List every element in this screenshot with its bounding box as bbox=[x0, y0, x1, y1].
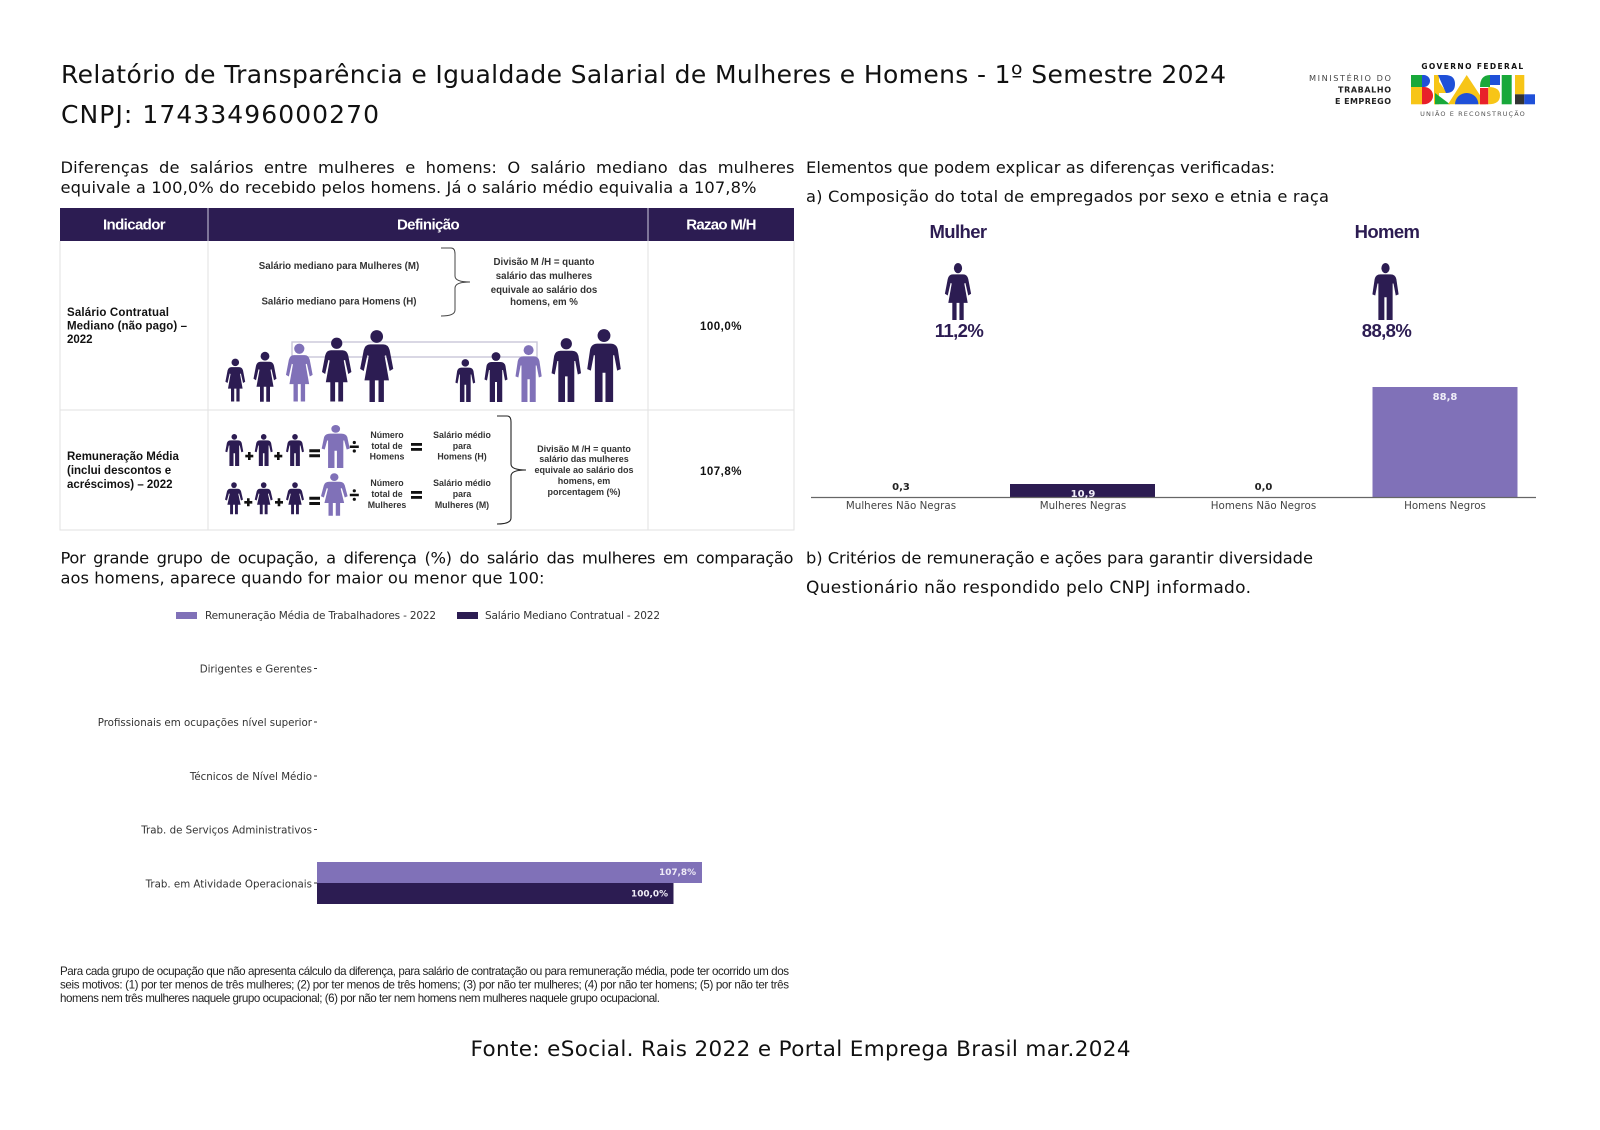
bar chart: sex and race composition: Mulheres Negras bbox=[1040, 500, 1126, 512]
row: remuneração média: equivale ao salário dos bbox=[534, 465, 634, 475]
icon group: women average bbox=[225, 473, 422, 516]
A bbox=[1448, 75, 1486, 104]
logo: Ministério do Trabalho e Governo Federal: GOVERNO FEDERAL bbox=[1421, 62, 1525, 71]
stat: homem bbox=[1355, 221, 1420, 341]
bar chart: sex and race composition: 88,8 bbox=[1433, 392, 1457, 403]
row: salário contratual mediano: Mediano (não pago) – bbox=[67, 320, 188, 332]
CNPJ heading: CNPJ: 17433496000270 bbox=[61, 100, 379, 129]
heading: explanatory elements: Elementos que podem explicar as diferenças verificadas: bbox=[806, 158, 1275, 177]
legend: Remuneração Média de Trabalhadores - 2022 bbox=[205, 610, 436, 622]
row: remuneração média: total de bbox=[371, 441, 403, 451]
row: remuneração média: para bbox=[453, 441, 471, 451]
row: remuneração média: Mulheres bbox=[368, 500, 406, 510]
row: remuneração média: acréscimos) – 2022 bbox=[67, 479, 172, 491]
logo: Ministério do Trabalho e Governo Federal: UNIÃO E RECONSTRUÇÃO bbox=[1420, 109, 1526, 118]
bar chart: occupation groups: Dirigentes e Gerentes bbox=[200, 664, 312, 676]
bar chart: sex and race composition bbox=[811, 387, 1536, 512]
row: remuneração média: Salário médio bbox=[433, 430, 491, 440]
row: remuneração média: total de bbox=[371, 489, 403, 499]
logo: Ministério do Trabalho e Governo Federal bbox=[1309, 62, 1535, 118]
logo: Ministério do Trabalho e Governo Federal: MINISTÉRIO DO bbox=[1309, 72, 1391, 83]
row: remuneração média: Homens (H) bbox=[437, 452, 487, 462]
indicators table bbox=[60, 208, 794, 530]
B bbox=[1411, 75, 1422, 87]
bar: salário mediano 100,0%: 100,0% bbox=[631, 890, 668, 900]
bar chart: sex and race composition: 0,3 bbox=[892, 482, 910, 493]
row: salário contratual mediano: 100,0% bbox=[700, 321, 742, 333]
row: remuneração média: Número bbox=[370, 478, 404, 488]
row: salário contratual mediano: 2022 bbox=[67, 334, 93, 346]
row: remuneração média: Mulheres (M) bbox=[435, 500, 489, 510]
row: remuneração média: salário das mulheres bbox=[539, 454, 629, 464]
row: salário contratual mediano: equivale ao salário dos bbox=[491, 285, 597, 296]
bar: salário mediano 100,0% bbox=[317, 883, 674, 904]
row: remuneração média: Remuneração Média bbox=[67, 451, 179, 463]
row: remuneração média: Salário médio bbox=[433, 478, 491, 488]
legend: Salário Mediano Contratual - 2022 bbox=[485, 610, 660, 622]
row: salário contratual mediano: homens, em % bbox=[510, 297, 578, 308]
footnote: Para cada grupo de ocupação que não apresenta cálculo da diferença, para salário de contratação ou para remuneração média, pode ter ocorrido um dos bbox=[60, 965, 789, 978]
L bbox=[1515, 75, 1524, 94]
table header: Razao M/H bbox=[686, 216, 756, 234]
bar chart: occupation groups: Técnicos de Nível Médio bbox=[189, 771, 312, 783]
stat: mulher bbox=[929, 221, 987, 341]
stat: homem: Homem bbox=[1355, 221, 1420, 242]
row: remuneração média: porcentagem (%) bbox=[547, 487, 621, 497]
row: salário contratual mediano: Salário mediano para Mulheres (M) bbox=[259, 261, 419, 272]
S bbox=[1480, 75, 1490, 87]
icon group: women by salary bbox=[225, 330, 393, 402]
bar chart: occupation groups: Profissionais em ocupações nível superior bbox=[98, 717, 313, 729]
row: remuneração média: (inclui descontos e bbox=[67, 465, 171, 477]
row: remuneração média bbox=[67, 416, 742, 524]
row: salário contratual mediano: Salário mediano para Homens (H) bbox=[261, 296, 417, 308]
stat: homem: 88,8% bbox=[1362, 320, 1411, 341]
bar chart: sex and race composition: Homens Negros bbox=[1404, 500, 1486, 512]
table header: Definição bbox=[397, 216, 459, 234]
row: salário contratual mediano: salário das mulheres bbox=[496, 271, 592, 282]
icon group: men average bbox=[225, 425, 422, 468]
table header: Indicador bbox=[103, 216, 166, 234]
I bbox=[1502, 75, 1512, 104]
row: remuneração média: homens, em bbox=[558, 476, 610, 486]
intro paragraph: salary differences bbox=[60, 158, 794, 197]
intro paragraph: salary differences: Diferenças de salários entre mulheres e homens: O salário mediano das mulheres bbox=[60, 158, 794, 177]
R bbox=[1434, 75, 1439, 104]
bar chart: sex and race composition: 0,0 bbox=[1255, 482, 1272, 493]
bar chart: occupation groups bbox=[98, 664, 702, 904]
paragraph: occupation groups bbox=[60, 548, 794, 588]
heading: criteria: b) Critérios de remuneração e ações para garantir diversidade bbox=[806, 548, 1313, 568]
row: remuneração média: Homens bbox=[370, 452, 404, 462]
icon: large brace bbox=[497, 416, 526, 524]
logo: Ministério do Trabalho e Governo Federal: TRABALHO bbox=[1338, 86, 1391, 94]
bar chart: sex and race composition: 10,9 bbox=[1071, 489, 1095, 500]
table header bbox=[60, 208, 794, 241]
logo: Ministério do Trabalho e Governo Federal: E EMPREGO bbox=[1335, 97, 1391, 106]
text: questionnaire not answered: Questionário não respondido pelo CNPJ informado. bbox=[806, 578, 1251, 598]
bar chart: sex and race composition: Homens Não Negros bbox=[1211, 500, 1316, 512]
paragraph: occupation groups: Por grande grupo de ocupação, a diferença (%) do salário das mulheres em comparação bbox=[60, 548, 794, 568]
row: remuneração média: Número bbox=[370, 430, 404, 440]
bar: remuneração média 107,8% bbox=[317, 862, 702, 883]
stat: mulher: 11,2% bbox=[935, 320, 983, 341]
footnote: seis motivos: (1) por ter menos de três mulheres; (2) por ter menos de três homens; (3) por não ter mulheres; (4) por não ter homens; (5) por não ter três bbox=[60, 978, 789, 992]
icon: brace bbox=[441, 248, 470, 316]
paragraph: occupation groups: aos homens, aparece quando for maior ou menor que 100: bbox=[60, 568, 544, 588]
row: salário contratual mediano bbox=[67, 248, 742, 402]
row: salário contratual mediano: Salário Contratual bbox=[67, 307, 169, 319]
bar chart: occupation groups: Trab. de Serviços Administrativos bbox=[140, 824, 312, 836]
footnote bbox=[60, 965, 789, 1005]
row: salário contratual mediano: Divisão M /H = quanto bbox=[494, 257, 595, 268]
icon group: men by salary bbox=[455, 329, 621, 402]
row: remuneração média: Divisão M /H = quanto bbox=[537, 444, 631, 454]
row: remuneração média: 107,8% bbox=[700, 466, 742, 478]
heading: composition: a) Composição do total de empregados por sexo e etnia e raça bbox=[806, 187, 1329, 206]
row: remuneração média: para bbox=[453, 489, 471, 499]
bar chart: sex and race composition: Mulheres Não Negras bbox=[846, 500, 956, 512]
legend bbox=[176, 610, 660, 622]
bar chart: occupation groups: Trab. em Atividade Operacionais bbox=[145, 878, 312, 890]
title: Relatório de Transparência e Igualdade Salarial de Mulheres e Homens - 1º Semestre 2024 bbox=[61, 60, 1226, 89]
source note: Fonte: eSocial. Rais 2022 e Portal Emprega Brasil mar.2024 bbox=[470, 1037, 1130, 1062]
bar: remuneração média 107,8%: 107,8% bbox=[659, 868, 696, 878]
intro paragraph: salary differences: equivale a 100,0% do recebido pelos homens. Já o salário médio equivalia a 107,8% bbox=[60, 178, 756, 197]
footnote: homens nem três mulheres naquele grupo ocupacional; (6) por não ter nem homens nem mulheres naquele grupo ocupacional. bbox=[60, 992, 660, 1005]
stat: mulher: Mulher bbox=[929, 221, 987, 242]
